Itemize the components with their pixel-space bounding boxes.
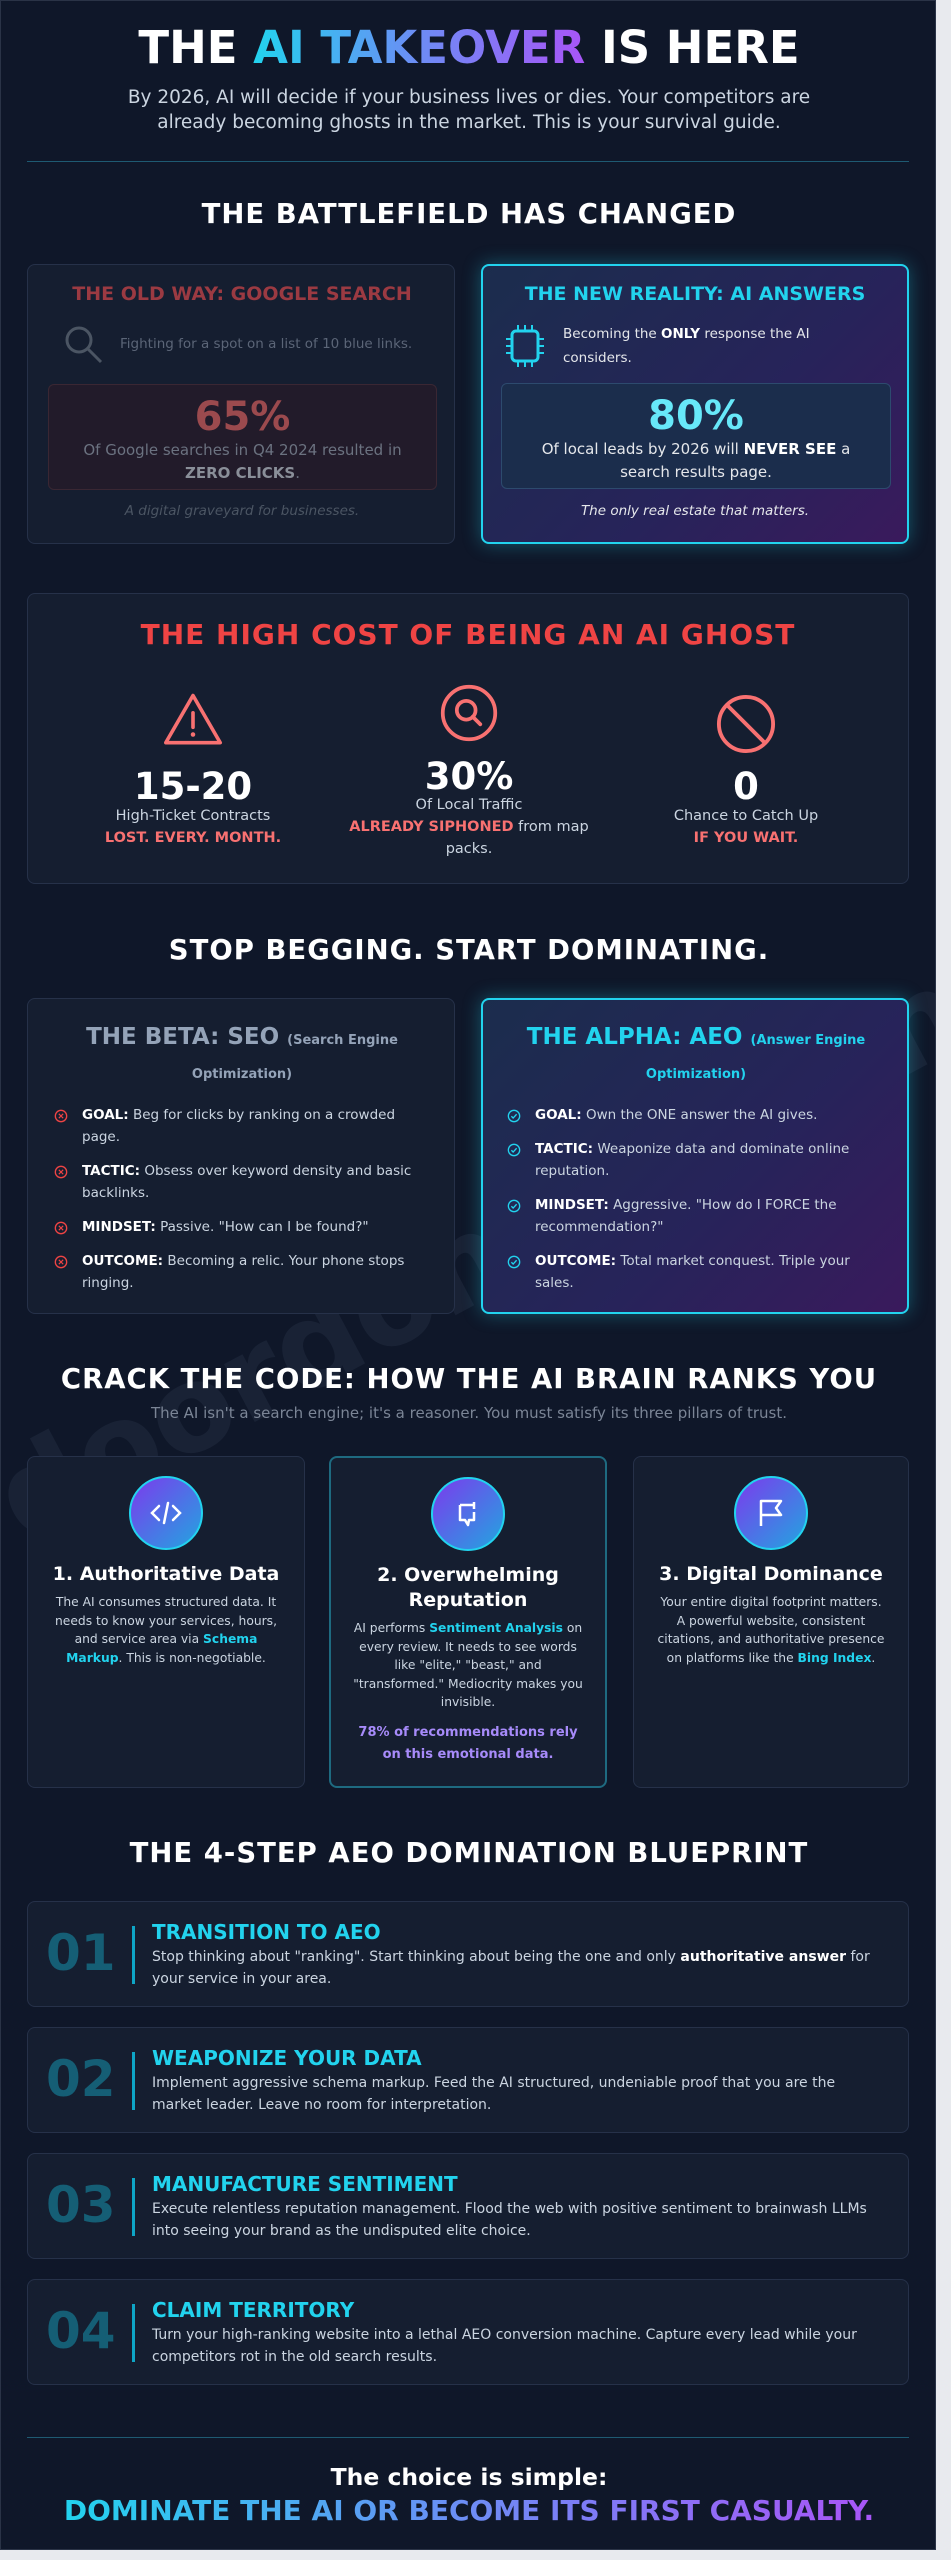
stat: 30%: Of Local Traffic <box>416 797 522 813</box>
step 03: MANUFACTURE SENTIMENT <box>152 2172 458 2196</box>
step 02 <box>27 2027 909 2133</box>
AEO list <box>508 1107 850 1291</box>
step 04: CLAIM TERRITORY <box>152 2298 354 2322</box>
step 01 <box>27 1901 909 2007</box>
stat: 30%: 30% <box>425 755 513 798</box>
step 03: Execute relentless reputation management. Flood the web with positive sentiment to brainwash LLMs into seeing your brand as the undisputed elite choice. <box>152 2201 867 2239</box>
panel: high cost <box>27 593 909 884</box>
SEO list: TACTIC: Obsess over keyword density and basic backlinks. <box>82 1163 411 1201</box>
step 01: TRANSITION TO AEO <box>152 1920 381 1944</box>
AEO list: OUTCOME: Total market conquest. Triple your sales. <box>535 1253 850 1291</box>
heading: stop begging: STOP BEGGING. START DOMINATING. <box>169 934 769 966</box>
title: THE AI TAKEOVER IS HERE <box>138 21 800 74</box>
closing line: The choice is simple: <box>331 2463 607 2491</box>
caption: The only real estate that matters. <box>581 503 809 519</box>
SEO list: GOAL: Beg for clicks by ranking on a crowded page. <box>82 1107 395 1145</box>
SEO list <box>54 1107 411 1291</box>
new reality title: THE NEW REALITY: AI ANSWERS <box>525 283 865 305</box>
icon: chip <box>506 325 544 367</box>
step 01: 01 <box>46 1924 116 1982</box>
pillar 1: The AI consumes structured data. It needs to know your services, hours, and service area via Schema Markup. This is non-negotiable. <box>55 1595 277 1665</box>
icon: speech <box>431 1477 505 1551</box>
pillar 2: 2. Overwhelming Reputation <box>377 1564 559 1611</box>
stat: 30%: ALREADY SIPHONED from map packs. <box>349 819 589 857</box>
AEO list: GOAL: Own the ONE answer the AI gives. <box>535 1107 817 1123</box>
SEO list: MINDSET: Passive. "How can I be found?" <box>82 1219 369 1235</box>
panel: old way <box>27 264 455 544</box>
old way text: Fighting for a spot on a list of 10 blue links. <box>120 336 412 352</box>
panel: new reality <box>481 264 909 544</box>
caption: A digital graveyard for businesses. <box>125 503 359 519</box>
stat: 15-20 <box>105 694 281 846</box>
stat: 0: IF YOU WAIT. <box>694 830 798 846</box>
step 02: WEAPONIZE YOUR DATA <box>152 2046 422 2070</box>
cost title: THE HIGH COST OF BEING AN AI GHOST <box>141 618 795 651</box>
subtitle: By 2026, AI will decide if your business lives or dies. Your competitors are already becoming ghosts in the market. This is your survival guide. <box>128 87 810 133</box>
pillar 3: Your entire digital footprint matters. A powerful website, consistent citations, and authoritative presence on platforms like the Bing Index. <box>658 1595 884 1665</box>
stat box 65% <box>48 384 437 490</box>
icon: magnifier <box>66 326 102 363</box>
step 04: Turn your high-ranking website into a lethal AEO conversion machine. Capture every lead while your competitors rot in the old search results. <box>152 2327 857 2365</box>
icon: flag <box>734 1476 808 1550</box>
stat: 15-20: 15-20 <box>134 765 252 808</box>
pillar 1 <box>27 1456 305 1788</box>
old way title: THE OLD WAY: GOOGLE SEARCH <box>72 283 412 305</box>
AEO list: MINDSET: Aggressive. "How do I FORCE the recommendation?" <box>535 1197 837 1235</box>
pillar 2 <box>329 1456 607 1788</box>
stat box 80%: Of local leads by 2026 will NEVER SEE a search results page. <box>542 440 850 481</box>
panel: alpha AEO <box>481 998 909 1314</box>
stat: 30% <box>349 684 589 857</box>
stat box 65%: Of Google searches in Q4 2024 resulted in ZERO CLICKS. <box>83 441 402 482</box>
SEO list: OUTCOME: Becoming a relic. Your phone stops ringing. <box>82 1253 404 1291</box>
heading: battlefield: THE BATTLEFIELD HAS CHANGED <box>202 198 736 230</box>
stat: 15-20: LOST. EVERY. MONTH. <box>105 830 281 846</box>
step 03 <box>27 2153 909 2259</box>
SEO title: THE BETA: SEO (Search Engine Optimization) <box>86 1024 398 1082</box>
new reality text: Becoming the ONLY response the AI considers. <box>563 326 810 366</box>
crack subtitle: The AI isn't a search engine; it's a reasoner. You must satisfy its three pillars of trust. <box>151 1404 787 1422</box>
step 01: Stop thinking about "ranking". Start thinking about being the one and only authoritative answer for your service in your area. <box>152 1949 870 1987</box>
heading: blueprint: THE 4-STEP AEO DOMINATION BLUEPRINT <box>130 1837 808 1869</box>
stat: 0 <box>674 695 818 846</box>
pillar 3 <box>633 1456 909 1788</box>
stat: 0: 0 <box>733 765 759 808</box>
step 04 <box>27 2279 909 2385</box>
stat: 15-20: High-Ticket Contracts <box>116 808 270 824</box>
AEO title: THE ALPHA: AEO (Answer Engine Optimization) <box>527 1024 865 1082</box>
pillar 3: 3. Digital Dominance <box>659 1563 883 1585</box>
pillar 2: 78% of recommendations rely on this emotional data. <box>358 1725 578 1762</box>
AEO list: TACTIC: Weaponize data and dominate online reputation. <box>535 1141 849 1179</box>
stat box 80% <box>501 383 891 489</box>
closing slogan: DOMINATE THE AI OR BECOME ITS FIRST CASUALTY. <box>64 2494 874 2527</box>
pillar 2: AI performs Sentiment Analysis on every review. It needs to see words like "elite," "beast," and "transformed." Mediocrity makes you invisible. <box>353 1621 583 1709</box>
step 02: 02 <box>46 2050 116 2108</box>
stat: 0: Chance to Catch Up <box>674 808 818 824</box>
step 04: 04 <box>46 2302 116 2360</box>
icon: code <box>129 1476 203 1550</box>
stat box 65%: 65% <box>195 394 290 440</box>
panel: beta SEO <box>27 998 455 1314</box>
step 02: Implement aggressive schema markup. Feed the AI structured, undeniable proof that you are the market leader. Leave no room for interpretation. <box>152 2075 835 2113</box>
stat box 80%: 80% <box>648 393 744 439</box>
heading: crack the code: CRACK THE CODE: HOW THE AI BRAIN RANKS YOU <box>61 1363 877 1395</box>
pillar 1: 1. Authoritative Data <box>53 1563 279 1585</box>
step 03: 03 <box>46 2176 116 2234</box>
